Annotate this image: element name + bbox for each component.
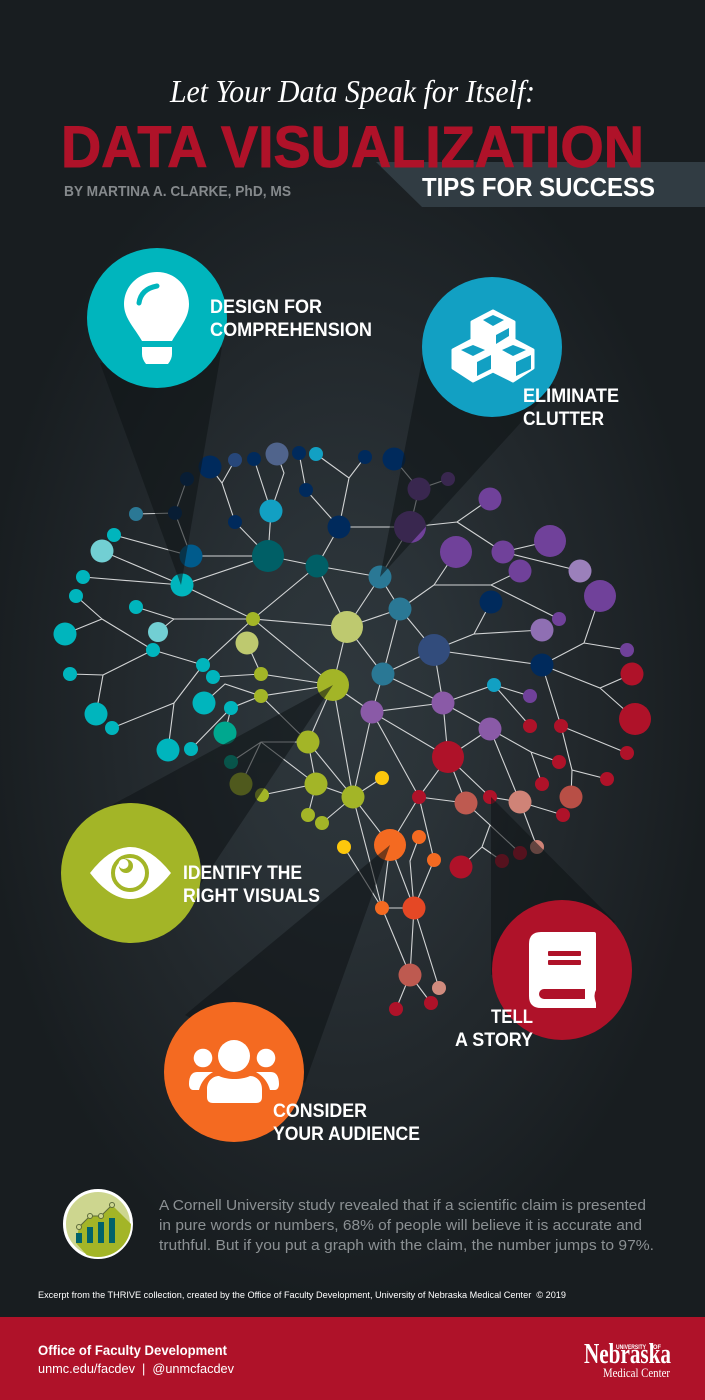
label: RIGHT VISUALS bbox=[183, 886, 320, 907]
label: DESIGN FOR bbox=[210, 297, 322, 318]
tip: identify the right visuals bbox=[61, 803, 320, 943]
footer bar bbox=[0, 1317, 705, 1400]
label: CONSIDER bbox=[273, 1101, 367, 1122]
tip: tell a story bbox=[455, 900, 632, 1051]
label: A STORY bbox=[455, 1030, 533, 1051]
icon: light bulb bbox=[124, 272, 189, 364]
web links: unmc.edu/facdev | @unmcfacdev bbox=[38, 1361, 234, 1376]
tip: design for comprehension bbox=[87, 248, 372, 388]
logo: university of nebraska medical center: Nebraska bbox=[584, 1338, 671, 1370]
author byline: BY MARTINA A. CLARKE, PhD, MS bbox=[64, 183, 291, 200]
icon: eye bbox=[90, 847, 171, 899]
label: TELL bbox=[491, 1007, 533, 1028]
icon: people bbox=[189, 1040, 279, 1103]
label: ELIMINATE bbox=[523, 386, 619, 407]
nodes: teal cluster bbox=[54, 528, 238, 769]
logo: university of nebraska medical center: UNIVERSITY bbox=[616, 1345, 646, 1351]
circle: green bbox=[61, 803, 201, 943]
tip: consider your audience bbox=[164, 1002, 420, 1145]
nodes: purple cluster bbox=[360, 472, 634, 740]
title: italic lead-in: Let Your Data Speak for Itself: bbox=[169, 73, 535, 109]
tip: eliminate clutter bbox=[422, 277, 619, 430]
excerpt credit: Excerpt from the THRIVE collection, created by the Office of Faculty Development, University of Nebraska Medical Center © 2019 bbox=[38, 1290, 566, 1301]
banner: tips for success band bbox=[376, 162, 705, 207]
logo: university of nebraska medical center bbox=[584, 1338, 671, 1380]
title: data visualization: DATA VISUALIZATION bbox=[61, 115, 644, 180]
label: COMPREHENSION bbox=[210, 320, 372, 341]
office name: Office of Faculty Development bbox=[38, 1343, 227, 1358]
nodes: red and orange cluster bbox=[374, 662, 651, 1016]
network diagram bbox=[54, 442, 651, 1016]
subtitle: tips for success: TIPS FOR SUCCESS bbox=[422, 174, 655, 202]
logo: university of nebraska medical center: OF bbox=[653, 1344, 661, 1351]
icon: chart badge bbox=[63, 1189, 133, 1259]
label: CLUTTER bbox=[523, 409, 604, 430]
circle: teal bbox=[87, 248, 227, 388]
circle: blue bbox=[422, 277, 562, 417]
icon: book bbox=[529, 932, 596, 1008]
statistic text block: A Cornell University study revealed that if a scientific claim is presented bbox=[159, 1197, 646, 1214]
nodes: navy and blue cluster bbox=[129, 442, 554, 692]
statistic text block: truthful. But if you put a graph with the claim, the number jumps to 97%. bbox=[159, 1237, 654, 1254]
label: YOUR AUDIENCE bbox=[273, 1124, 420, 1145]
circle: red bbox=[492, 900, 632, 1040]
circle: orange bbox=[164, 1002, 304, 1142]
icon: stacked cubes bbox=[453, 311, 533, 381]
spotlight cones from tip circles bbox=[88, 347, 615, 1083]
logo: university of nebraska medical center: Medical Center bbox=[603, 1365, 671, 1380]
nodes: green and yellow cluster bbox=[230, 611, 389, 854]
header bbox=[61, 73, 655, 202]
statistic text block: in pure words or numbers, 68% of people will believe it is accurate and bbox=[159, 1217, 642, 1234]
label: IDENTIFY THE bbox=[183, 863, 302, 884]
network links bbox=[65, 453, 635, 1009]
